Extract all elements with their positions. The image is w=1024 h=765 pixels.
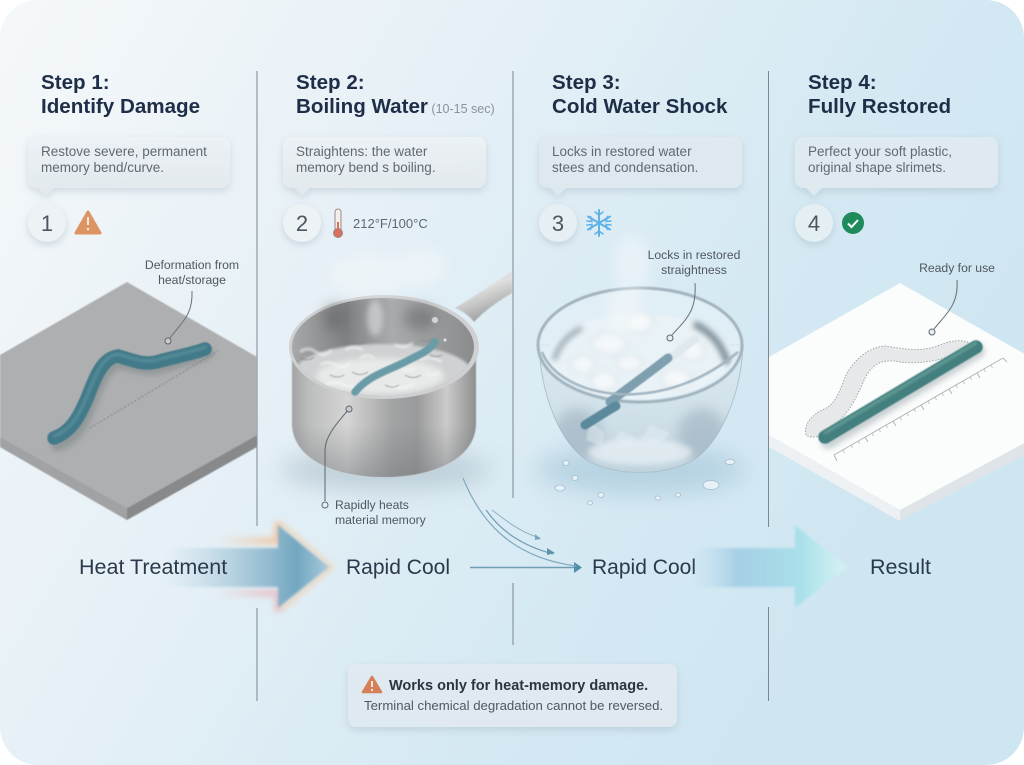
annotation: locks in straightness (648, 248, 740, 341)
column dividers (257, 71, 768, 701)
steam (607, 235, 650, 334)
callout: step 2: memory bend s boiling. (296, 160, 436, 175)
annotation: deformation: Deformation from (145, 258, 239, 272)
icon: snowflake (587, 210, 611, 236)
illustration: glass bowl with ice (535, 235, 745, 505)
icon: warning triangle (76, 212, 100, 233)
number badge 2 (283, 204, 321, 242)
panel: step 2 (280, 71, 512, 527)
annotation: ready for use: Ready for use (919, 261, 995, 275)
panel: step 4 (769, 71, 1024, 521)
worm submerged (640, 338, 696, 380)
icon: warning (363, 677, 381, 692)
number badge 1 (28, 204, 66, 242)
arrow: result (690, 525, 847, 608)
heading: step 1: Step 1: (41, 71, 110, 94)
pot body (292, 347, 476, 477)
heading: step 3: Step 3: (552, 71, 621, 94)
panel: step 1 (0, 71, 257, 520)
water and ice (550, 314, 733, 399)
callout: step 1 (28, 137, 230, 196)
arrow: thin cooling arrow with curves (463, 478, 582, 573)
callout: step 1: memory bend/curve. (41, 160, 164, 175)
process flow row (79, 478, 931, 612)
annotation: rapidly heats (322, 406, 427, 527)
worm: bent (54, 349, 205, 438)
annotation: rapidly heats: material memory (335, 513, 427, 527)
callout: step 2: Straightens: the water (296, 144, 428, 159)
annotation: locks in straightness: Locks in restored (648, 248, 740, 262)
water droplets (555, 460, 735, 505)
steam (330, 250, 446, 295)
annotation: deformation (145, 258, 239, 344)
label: result: Result (870, 555, 931, 579)
annotation: deformation: heat/storage (158, 273, 226, 287)
illustration: boiling pot (280, 250, 512, 490)
callout: step 3 (539, 137, 742, 196)
callout: step 3: Locks in restored water (552, 144, 692, 159)
label: rapid cool 1: Rapid Cool (346, 555, 450, 579)
boiling water (298, 340, 468, 396)
warning text: Works only for heat-memory damage. (389, 678, 648, 694)
label: rapid cool 2: Rapid Cool (592, 555, 696, 579)
handle (455, 272, 512, 322)
number badge 3: 3 (552, 211, 564, 236)
number badge 3 (539, 204, 577, 242)
ghost outline of old bend (805, 341, 972, 437)
callout: step 2 (283, 137, 486, 196)
heading: step 2: Step 2: (296, 71, 365, 94)
worm: straight (828, 351, 978, 442)
warning subtext: Terminal chemical degradation cannot be reversed. (364, 698, 663, 713)
annotation: rapidly heats: Rapidly heats (335, 498, 409, 512)
callout: step 4: Perfect your soft plastic, (808, 144, 952, 159)
number badge 1: 1 (41, 211, 53, 236)
callout: step 4: original shape slrimets. (808, 160, 946, 175)
ruler (834, 358, 1007, 461)
callout: step 4 (795, 137, 998, 196)
icon: green check (842, 212, 864, 234)
illustration: bent worm on grey slab (0, 282, 257, 520)
heading: step 4: Fully Restored (808, 95, 951, 118)
number badge 4 (795, 204, 833, 242)
callout: step 3: stees and condensation. (552, 160, 698, 175)
heading: step 2: Boiling Water (10-15 sec) (296, 95, 495, 118)
temperature label: 212°F/100°C (353, 216, 428, 231)
number badge 4: 4 (808, 211, 820, 236)
heading: step 3: Cold Water Shock (552, 95, 728, 118)
annotation: ready for use (919, 261, 995, 335)
annotation: locks in straightness: straightness (661, 263, 727, 277)
icon: thermometer (334, 209, 342, 238)
label: heat treatment: Heat Treatment (79, 555, 227, 579)
warning note (348, 664, 677, 727)
number badge 2: 2 (296, 211, 308, 236)
callout: step 1: Restove severe, permanent (41, 144, 207, 159)
heading: step 1: Identify Damage (41, 95, 200, 118)
arrow: heat treatment (165, 522, 331, 612)
worm in water (355, 342, 435, 392)
illustration: straight worm on white slab (769, 283, 1024, 521)
bowl body (539, 345, 743, 472)
panel: step 3 (535, 71, 745, 505)
heading: step 4: Step 4: (808, 71, 877, 94)
